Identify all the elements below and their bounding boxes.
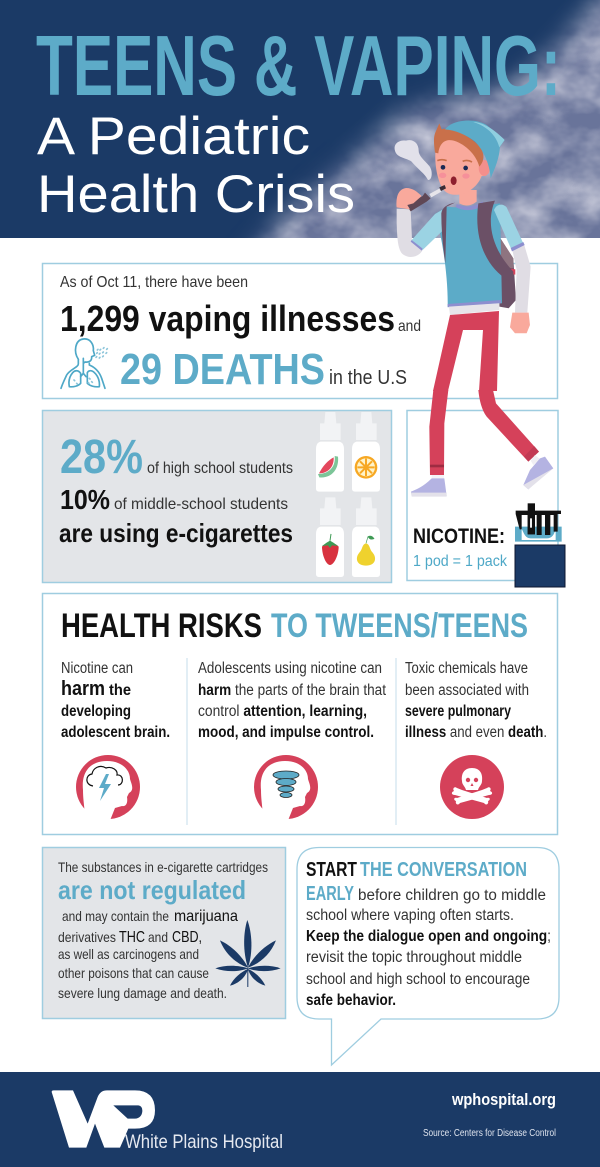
substance details: severe lung damage and death. (58, 985, 227, 1001)
raised hand (397, 188, 422, 209)
high school percentage: 28% (60, 431, 143, 484)
illnesses statistic: 1,299 vaping illnesses (60, 298, 395, 339)
title line: health crisis: Health Crisis (37, 165, 355, 224)
backpack (499, 237, 516, 308)
left sleeve (412, 210, 444, 250)
panel: usage statistics (42, 410, 392, 582)
column: brain development: harm (61, 678, 105, 700)
panel: illness statistics (42, 264, 558, 398)
waistband (449, 303, 499, 315)
panel: unregulated substances (42, 848, 286, 1018)
bubble heading: THE CONVERSATION (360, 859, 527, 881)
illustration: teen vaping (395, 120, 553, 497)
speech bubble: start the conversation (297, 848, 559, 1065)
bubble body: before children go to middle (358, 887, 546, 904)
vape device (406, 185, 446, 211)
title line: a pediatric: A Pediatric (37, 107, 310, 166)
icon: skull and crossbones (440, 755, 504, 819)
panel: health risks (42, 594, 558, 834)
icon: head with tornado (254, 755, 318, 820)
header background (0, 0, 600, 238)
legs and shoes (411, 311, 553, 497)
bubble body: school where vaping often starts. (306, 907, 514, 924)
column: toxic chemicals (405, 660, 547, 741)
column: brain function: mood, and impulse control. (198, 724, 374, 741)
bubble body (306, 887, 551, 1009)
bubble body: revisit the topic throughout middle (306, 949, 522, 966)
middle school label: of middle-school students (114, 496, 288, 513)
column: toxic chemicals: Toxic chemicals have (405, 660, 528, 677)
location text: in the U.S (329, 367, 407, 389)
ear (479, 160, 490, 176)
substance details: derivatives (58, 929, 116, 945)
substance details: as well as carcinogens and (58, 946, 199, 962)
bubble heading: START (306, 859, 357, 881)
column: brain development: the (109, 682, 131, 699)
column: toxic chemicals: illness and even death. (405, 724, 547, 741)
bubble body: safe behavior. (306, 992, 396, 1009)
heading: health risks: HEALTH RISKS (61, 607, 262, 645)
lowered hand (510, 313, 530, 333)
source: Source: Centers for Disease Control (423, 1128, 556, 1139)
icon: cannabis leaf (215, 920, 281, 987)
right sleeve and arm (512, 244, 531, 313)
icon: head with storm cloud (76, 755, 140, 820)
column: brain function: harm the parts of the brain that (198, 682, 387, 699)
connector word: and (398, 318, 421, 335)
bubble heading: EARLY (306, 883, 354, 905)
icon: flavored bottles (316, 412, 380, 577)
icon: lungs (61, 339, 107, 388)
substance details: other poisons that can cause (58, 965, 209, 981)
face details (437, 160, 472, 185)
vapor cloud (395, 140, 432, 180)
heading: health risks (61, 607, 528, 645)
panel: nicotine comparison (407, 410, 565, 587)
substance details: marijuana (174, 908, 238, 925)
column: toxic chemicals: been associated with (405, 682, 529, 699)
column: brain function (198, 660, 387, 741)
bubble body: Keep the dialogue open and ongoing; (306, 928, 551, 945)
column: brain function: Adolescents using nicotine can (198, 660, 382, 677)
column: brain development (61, 660, 170, 741)
bubble body: school and high school to encourage (306, 971, 530, 988)
title (36, 19, 561, 224)
nicotine heading: NICOTINE: (413, 525, 505, 548)
logo: WP (52, 1090, 155, 1148)
icon: cigarette pack (515, 503, 565, 587)
substance details: THC (119, 929, 145, 946)
website: wphospital.org (451, 1090, 556, 1109)
column: brain development: adolescent brain. (61, 724, 170, 741)
column: brain function: control attention, learning, (198, 703, 367, 720)
deaths statistic: 29 DEATHS (120, 345, 325, 394)
intro text: As of Oct 11, there have been (60, 274, 248, 291)
footer (0, 1072, 600, 1167)
pod equals pack: 1 pod = 1 pack (413, 553, 508, 570)
backpack straps (441, 203, 455, 263)
heading: health risks: TO TWEENS/TEENS (271, 607, 528, 645)
bubble heading (306, 859, 527, 905)
hospital name: White Plains Hospital (125, 1132, 283, 1153)
substance details: and (148, 929, 168, 945)
column: brain development: developing (61, 703, 131, 720)
neck (459, 190, 477, 205)
high school label: of high school students (147, 460, 293, 477)
middle school percentage: 10% (60, 484, 110, 515)
beanie (445, 120, 505, 178)
head (435, 138, 490, 195)
column: toxic chemicals: severe pulmonary (405, 703, 511, 720)
usage statement: are using e-cigarettes (59, 518, 293, 548)
column: brain development: Nicotine can (61, 660, 133, 677)
not regulated callout: are not regulated (58, 875, 246, 905)
sleeved arm, raised (397, 209, 423, 257)
substance details (58, 908, 238, 1001)
substance details: CBD, (172, 929, 202, 946)
torso (435, 203, 502, 307)
substance details: and may contain the (62, 908, 169, 924)
intro sentence: The substances in e-cigarette cartridges (58, 859, 268, 875)
hair (434, 123, 483, 167)
